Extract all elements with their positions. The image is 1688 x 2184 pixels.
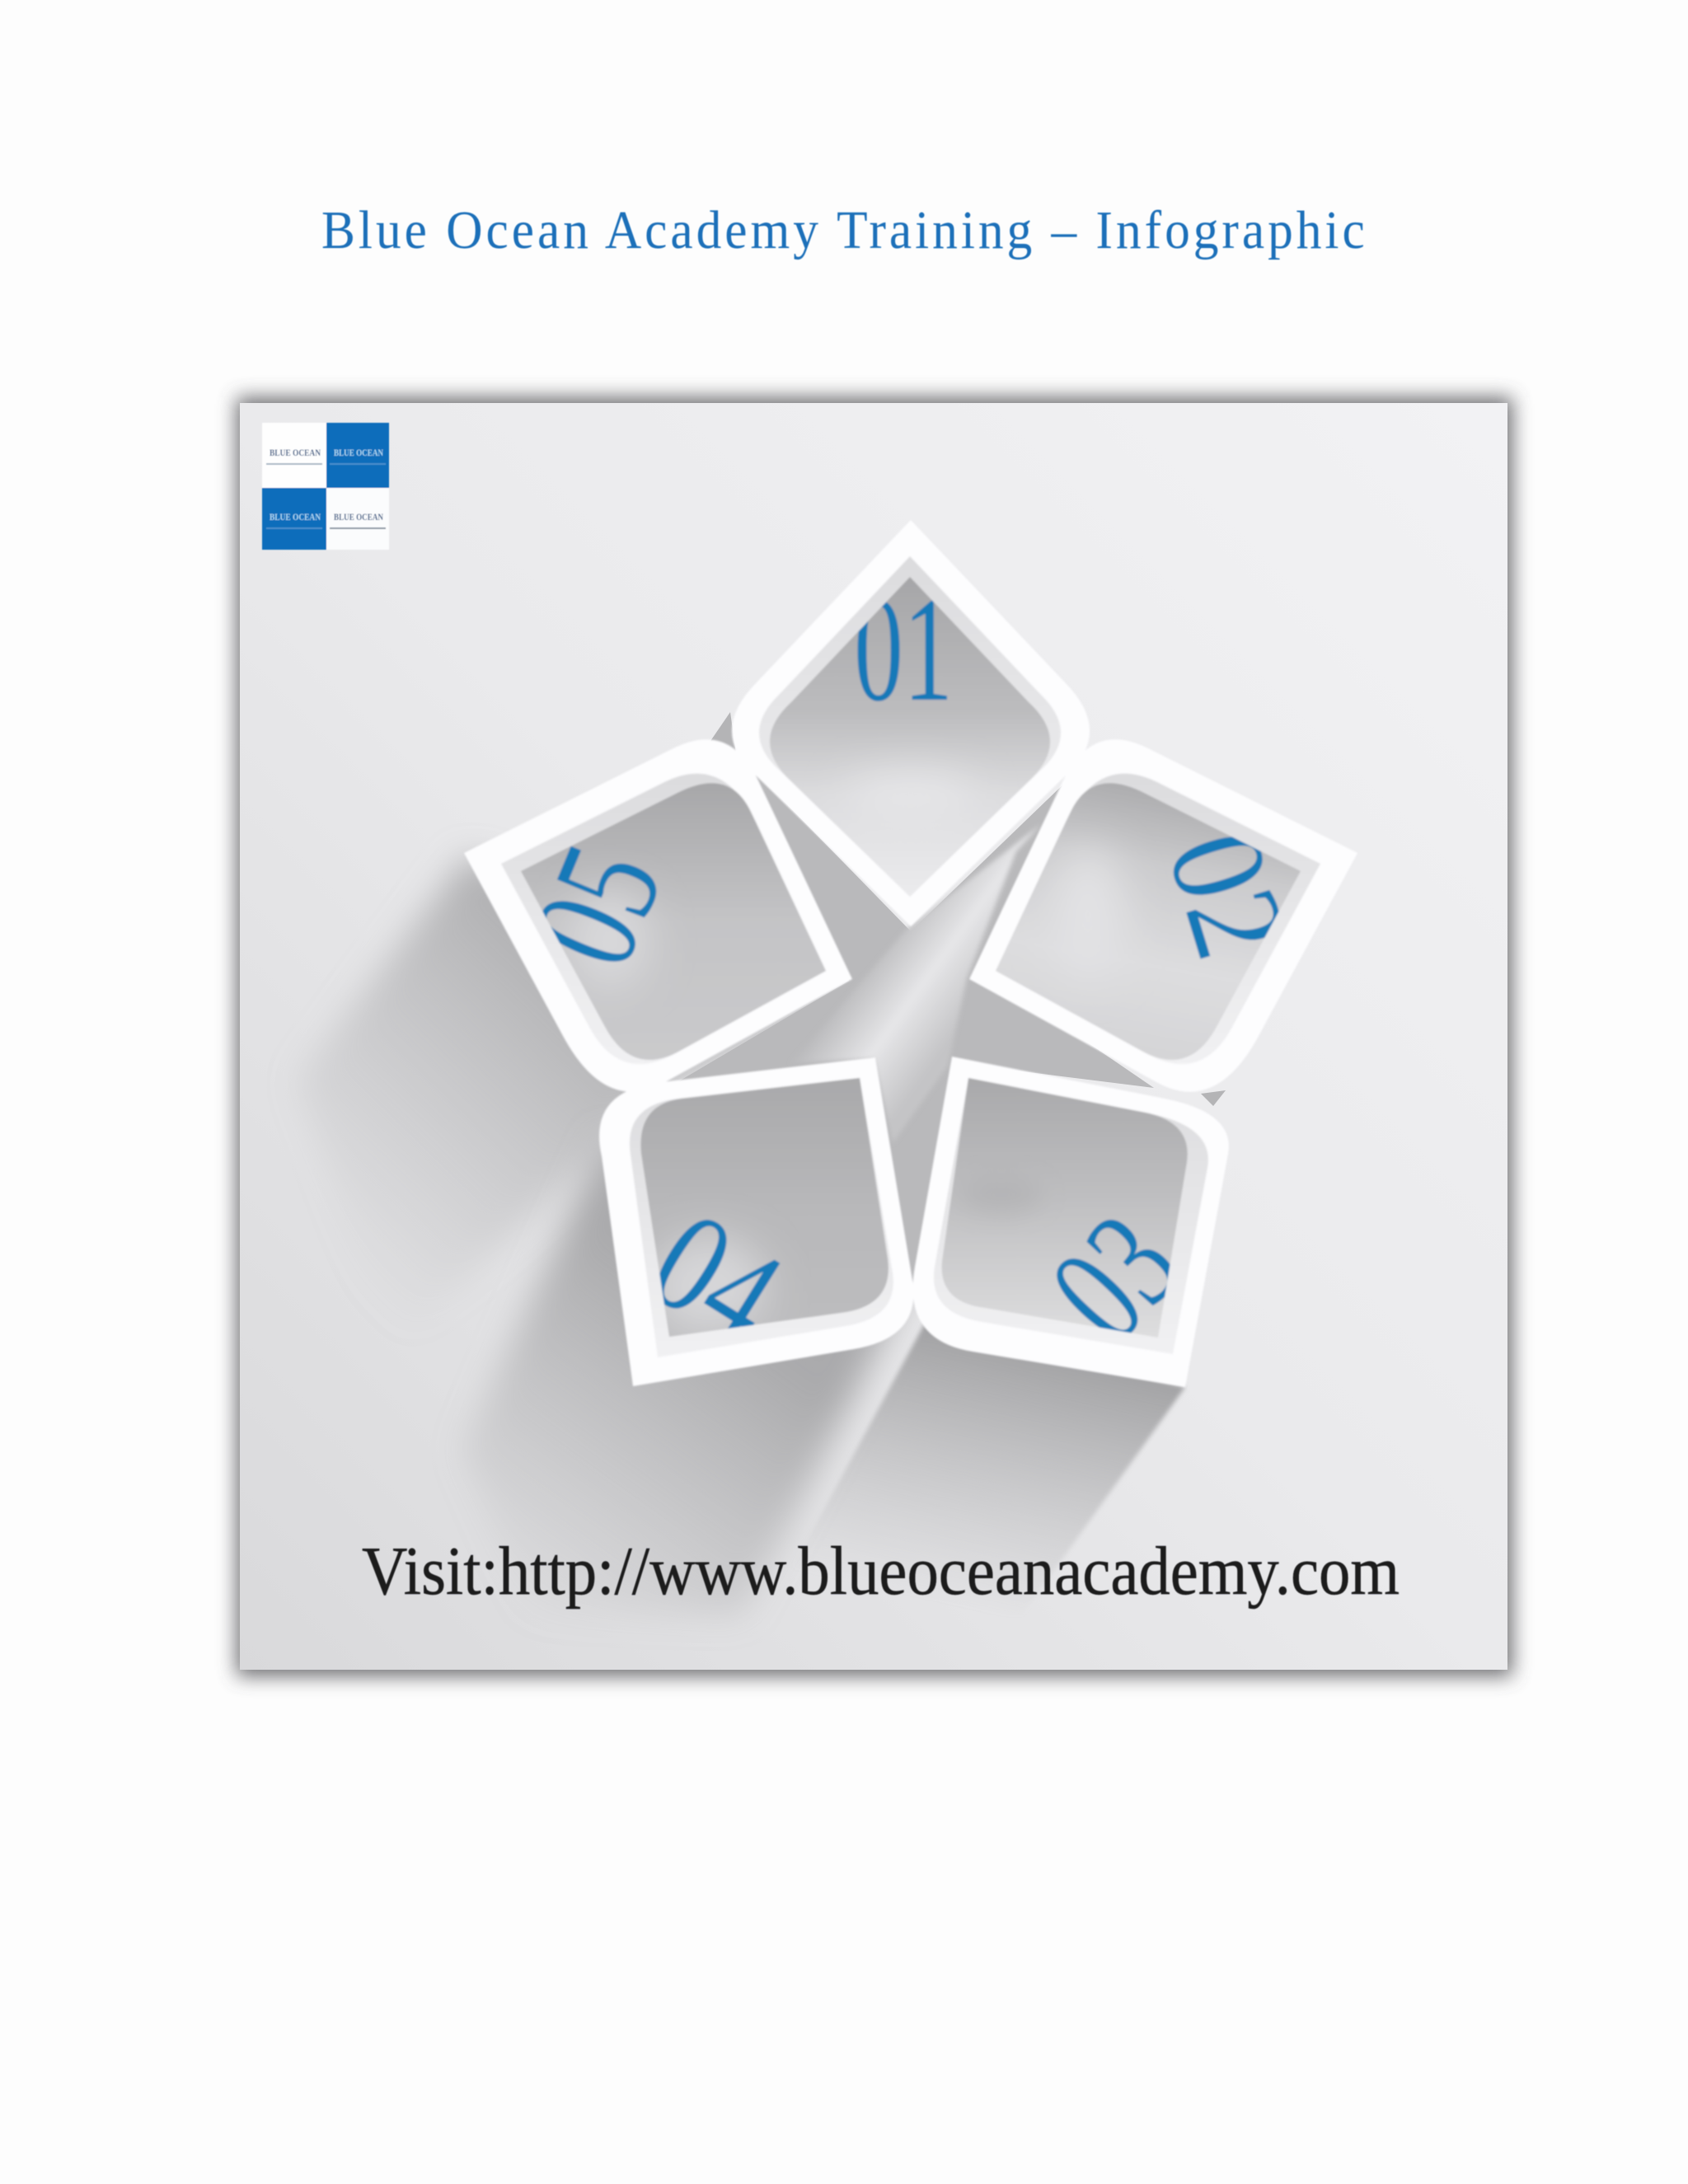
petal 04	[599, 1057, 914, 1386]
long shadows	[297, 857, 1185, 1615]
logo block: BLUE OCEAN	[334, 511, 383, 523]
logo block	[262, 423, 389, 550]
petal 02	[969, 739, 1357, 1092]
petal 05: 05	[502, 824, 694, 987]
petal 02: 02	[1139, 815, 1317, 974]
logo block: BLUE OCEAN	[270, 511, 321, 523]
panel drop shadow	[237, 397, 1512, 1676]
petal 03: 03	[1020, 1184, 1209, 1371]
title: Blue Ocean Academy Training – Infographic	[321, 199, 1365, 260]
petal 04: 04	[626, 1181, 808, 1377]
panel: image card	[237, 397, 1512, 1676]
centre shading between petals	[668, 712, 1226, 1294]
visit url caption: Visit:http://www.blueoceanacademy.com	[362, 1533, 1400, 1610]
petal 01	[732, 520, 1090, 926]
petal 01: 01	[854, 567, 953, 733]
logo block: BLUE OCEAN	[270, 447, 321, 458]
logo block: BLUE OCEAN	[334, 447, 383, 458]
petal 05	[464, 739, 852, 1092]
flower of five petals	[464, 520, 1357, 1387]
petal 03	[912, 1057, 1229, 1387]
panel surface	[240, 403, 1507, 1670]
